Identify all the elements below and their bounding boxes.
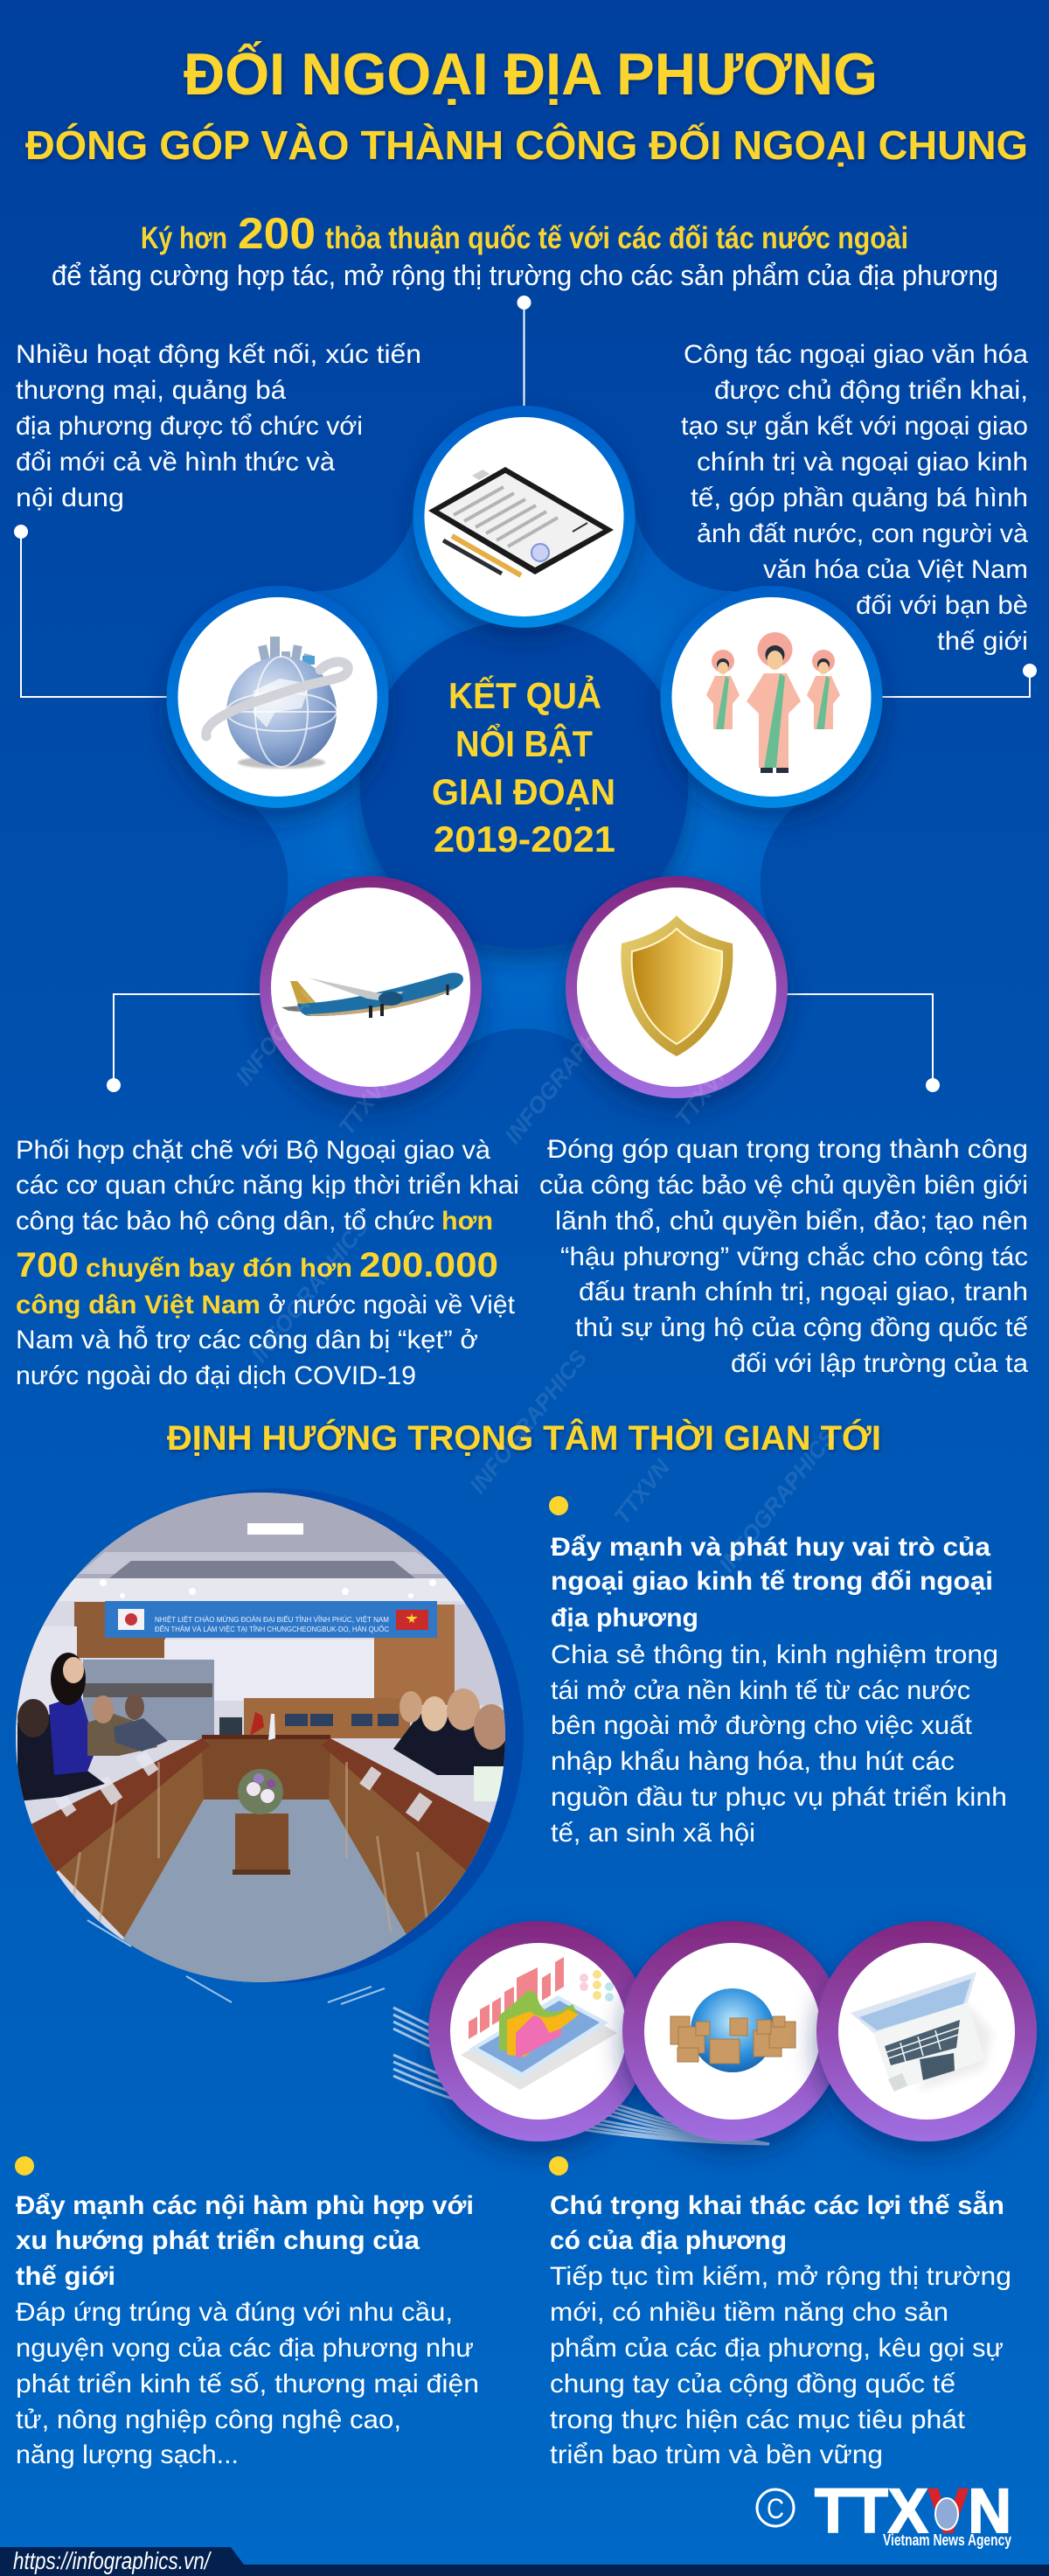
centre label: NỔI BẬT xyxy=(455,721,593,764)
text block: citizen protection: 200.000 xyxy=(359,1246,498,1285)
logo: TTXVN: Vietnam News Agency xyxy=(883,2531,1011,2549)
text block: global trends: xu hướng phát triển chung của xyxy=(16,2226,420,2255)
text block: local advantages: Tiếp tục tìm kiếm, mở rộng thị trường xyxy=(550,2262,1011,2291)
diagram: five-lobed results hub xyxy=(166,406,883,1098)
text block: trade promotion: địa phương được tổ chức với xyxy=(16,412,363,441)
text block: economic diplomacy: ngoại giao kinh tế trong đối ngoại xyxy=(551,1567,993,1596)
circle: global trade boxes xyxy=(622,1921,843,2141)
text block: local advantages: mới, có nhiều tiềm năng cho sản xyxy=(550,2298,948,2327)
circle: contract xyxy=(413,406,635,628)
text block: cultural diplomacy: tạo sự gắn kết với ngoại giao xyxy=(681,412,1028,441)
text block: trade promotion: nội dung xyxy=(16,484,124,512)
circle: women in ao dai xyxy=(661,586,883,808)
centre label: GIAI ĐOẠN xyxy=(432,771,615,812)
heading: future focus: ĐỊNH HƯỚNG TRỌNG TÂM THỜI GIAN TỚI xyxy=(167,1417,881,1458)
centre label: KẾT QUẢ xyxy=(448,674,601,716)
text block: global trends: thế giới xyxy=(16,2262,115,2291)
connector: left xyxy=(14,525,170,697)
centre circle xyxy=(360,620,689,949)
text block: cultural diplomacy: Công tác ngoại giao văn hóa xyxy=(684,340,1028,369)
watermarks: INFOGRAPHICS xyxy=(464,1345,593,1499)
title: ĐỐI NGOẠI ĐỊA PHƯƠNG xyxy=(184,40,878,108)
watermarks: INFOGRAPHICS xyxy=(713,1424,842,1577)
circle: globe and road xyxy=(166,586,388,808)
text block: economic diplomacy: tế, an sinh xã hội xyxy=(551,1819,755,1848)
circle: digital economy chart xyxy=(428,1921,649,2141)
decorative streaks xyxy=(87,1920,769,2144)
circle: airplane xyxy=(260,876,482,1098)
footer bar: https://infographics.vn/ xyxy=(13,2547,212,2574)
text block: trade promotion: thương mại, quảng bá xyxy=(16,376,286,405)
text block: local advantages: phẩm của các địa phương, kêu gọi sự xyxy=(550,2334,1004,2363)
text block: citizen protection xyxy=(16,1136,519,1390)
watermarks xyxy=(230,936,842,1577)
text block: local advantages: Chú trọng khai thác các lợi thế sẵn xyxy=(550,2190,1004,2220)
text block: economic diplomacy xyxy=(549,1496,1007,1848)
text block: 200 agreements: để tăng cường hợp tác, mở rộng thị trường cho các sản phẩm của địa phương xyxy=(52,260,998,291)
text block: local advantages xyxy=(549,2156,1011,2469)
text block: global trends: tử, nông nghiệp công nghệ cao, xyxy=(16,2405,401,2434)
title xyxy=(25,40,1028,168)
text block: global trends: Đẩy mạnh các nội hàm phù hợp với xyxy=(16,2191,474,2220)
watermarks: TTXVN xyxy=(333,1064,400,1140)
text block: economic diplomacy: Chia sẻ thông tin, kinh nghiệm trong xyxy=(551,1640,998,1669)
text block: 200 agreements: 200 xyxy=(238,209,316,258)
copyright mark xyxy=(757,2489,794,2526)
connector: right xyxy=(879,664,1037,697)
text block: citizen protection: chuyến bay đón hơn xyxy=(86,1254,352,1283)
text block: sovereignty: đấu tranh chính trị, ngoại giao, tranh xyxy=(579,1278,1028,1306)
text block: sovereignty xyxy=(539,1135,1028,1378)
watermarks: INFOGRAPHICS xyxy=(499,995,628,1149)
photo: delegation meeting: ĐẾN THĂM VÀ LÀM VIỆC TẠI TỈNH CHUNGCHEONGBUK-DO, HÀN QUỐC xyxy=(155,1625,389,1633)
text block: global trends: phát triển kinh tế số, thương mại điện xyxy=(16,2370,479,2398)
text block: economic diplomacy: tái mở cửa nền kinh tế từ các nước xyxy=(551,1676,970,1705)
text block: global trends: năng lượng sạch... xyxy=(16,2440,239,2469)
text block: sovereignty: đối với lập trường của ta xyxy=(731,1349,1028,1378)
text block: sovereignty: của công tác bảo vệ chủ quyền biên giới xyxy=(539,1171,1028,1200)
circle: gold shield xyxy=(566,876,788,1098)
text block: cultural diplomacy: chính trị và ngoại giao kinh xyxy=(697,448,1028,477)
text block: cultural diplomacy: tế, góp phần quảng bá hình xyxy=(691,484,1028,512)
centre label xyxy=(432,674,615,860)
text block: local advantages: có của địa phương xyxy=(550,2226,787,2255)
text block: citizen protection: 700 xyxy=(16,1246,79,1285)
text block: citizen protection: nước ngoài do đại dịch COVID-19 xyxy=(16,1361,416,1390)
text block: economic diplomacy: Đẩy mạnh và phát huy vai trò của xyxy=(551,1533,990,1562)
text block: citizen protection: công tác bảo hộ công dân, tổ chức xyxy=(16,1207,434,1236)
watermarks: TTXVN xyxy=(670,1055,737,1131)
text block: citizen protection: hơn xyxy=(441,1207,493,1236)
text block: local advantages: chung tay của cộng đồng quốc tế xyxy=(550,2370,955,2398)
text block: trade promotion: đổi mới cả về hình thức và xyxy=(16,448,335,477)
connector: lower right xyxy=(782,994,940,1092)
text block: citizen protection: Phối hợp chặt chẽ với Bộ Ngoại giao và xyxy=(16,1136,490,1165)
text block: cultural diplomacy: đối với bạn bè xyxy=(856,591,1028,620)
text block: economic diplomacy: địa phương xyxy=(551,1604,698,1633)
watermarks: INFOGRAPHICS xyxy=(246,1214,374,1368)
text block: trade promotion: Nhiều hoạt động kết nối, xúc tiến xyxy=(16,340,421,369)
text block: global trends: nguyện vọng của các địa phương như xyxy=(16,2334,474,2363)
text block: economic diplomacy: bên ngoài mở đường cho việc xuất xyxy=(551,1711,973,1740)
connector: lower left xyxy=(107,994,262,1092)
copyright mark: C xyxy=(767,2493,784,2524)
text block: cultural diplomacy: ảnh đất nước, con người và xyxy=(697,519,1028,548)
text block: citizen protection: Nam và hỗ trợ các công dân bị “kẹt” ở xyxy=(16,1326,478,1354)
text block: economic diplomacy: nhập khẩu hàng hóa, thu hút các xyxy=(551,1747,955,1776)
text block: cultural diplomacy xyxy=(681,340,1028,656)
text block: 200 agreements: Ký hơn xyxy=(141,221,227,255)
text block: citizen protection: các cơ quan chức năng kịp thời triển khai xyxy=(16,1171,519,1200)
photo: delegation meeting xyxy=(16,1488,524,1989)
text block: cultural diplomacy: được chủ động triển khai, xyxy=(714,376,1028,405)
text block: global trends xyxy=(15,2156,479,2469)
text block: trade promotion xyxy=(16,340,421,512)
text block: global trends: Đáp ứng trúng và đúng với nhu cầu, xyxy=(16,2298,453,2327)
text block: citizen protection: ở nước ngoài về Việt xyxy=(268,1291,516,1319)
text block: sovereignty: lãnh thổ, chủ quyền biển, đảo; tạo nên xyxy=(555,1207,1028,1236)
circle: laptop xyxy=(816,1921,1037,2141)
text block: local advantages: triển bao trùm và bền vững xyxy=(550,2440,883,2469)
logo: TTXVN: TTXVN xyxy=(815,2477,1011,2546)
text block: sovereignty: Đóng góp quan trọng trong thành công xyxy=(547,1135,1028,1164)
connector: top xyxy=(518,296,531,411)
watermarks: INFOGRAPHICS xyxy=(230,936,358,1090)
hub blob xyxy=(245,503,803,1071)
text block: cultural diplomacy: thế giới xyxy=(937,627,1028,656)
text block: economic diplomacy: nguồn đầu tư phục vụ phát triển kinh xyxy=(551,1783,1007,1812)
watermarks: TTXVN xyxy=(608,1453,676,1529)
text block: local advantages: trong thực hiện các mục tiêu phát xyxy=(550,2405,966,2434)
text block: citizen protection: công dân Việt Nam xyxy=(16,1291,261,1319)
photo: delegation meeting: NHIỆT LIỆT CHÀO MỪNG ĐOÀN ĐẠI BIỂU TỈNH VĨNH PHÚC, VIỆT NAM xyxy=(155,1616,389,1624)
text block: cultural diplomacy: văn hóa của Việt Nam xyxy=(763,555,1028,584)
text block: 200 agreements: thỏa thuận quốc tế với các đối tác nước ngoài xyxy=(325,221,908,255)
text block: 200 agreements xyxy=(52,209,998,291)
title: ĐÓNG GÓP VÀO THÀNH CÔNG ĐỐI NGOẠI CHUNG xyxy=(25,122,1028,168)
text block: sovereignty: thủ sự ủng hộ của cộng đồng quốc tế xyxy=(575,1313,1028,1342)
footer bar xyxy=(0,2547,1049,2576)
text block: sovereignty: “hậu phương” vững chắc cho công tác xyxy=(560,1243,1028,1271)
centre label: 2019-2021 xyxy=(434,818,615,860)
